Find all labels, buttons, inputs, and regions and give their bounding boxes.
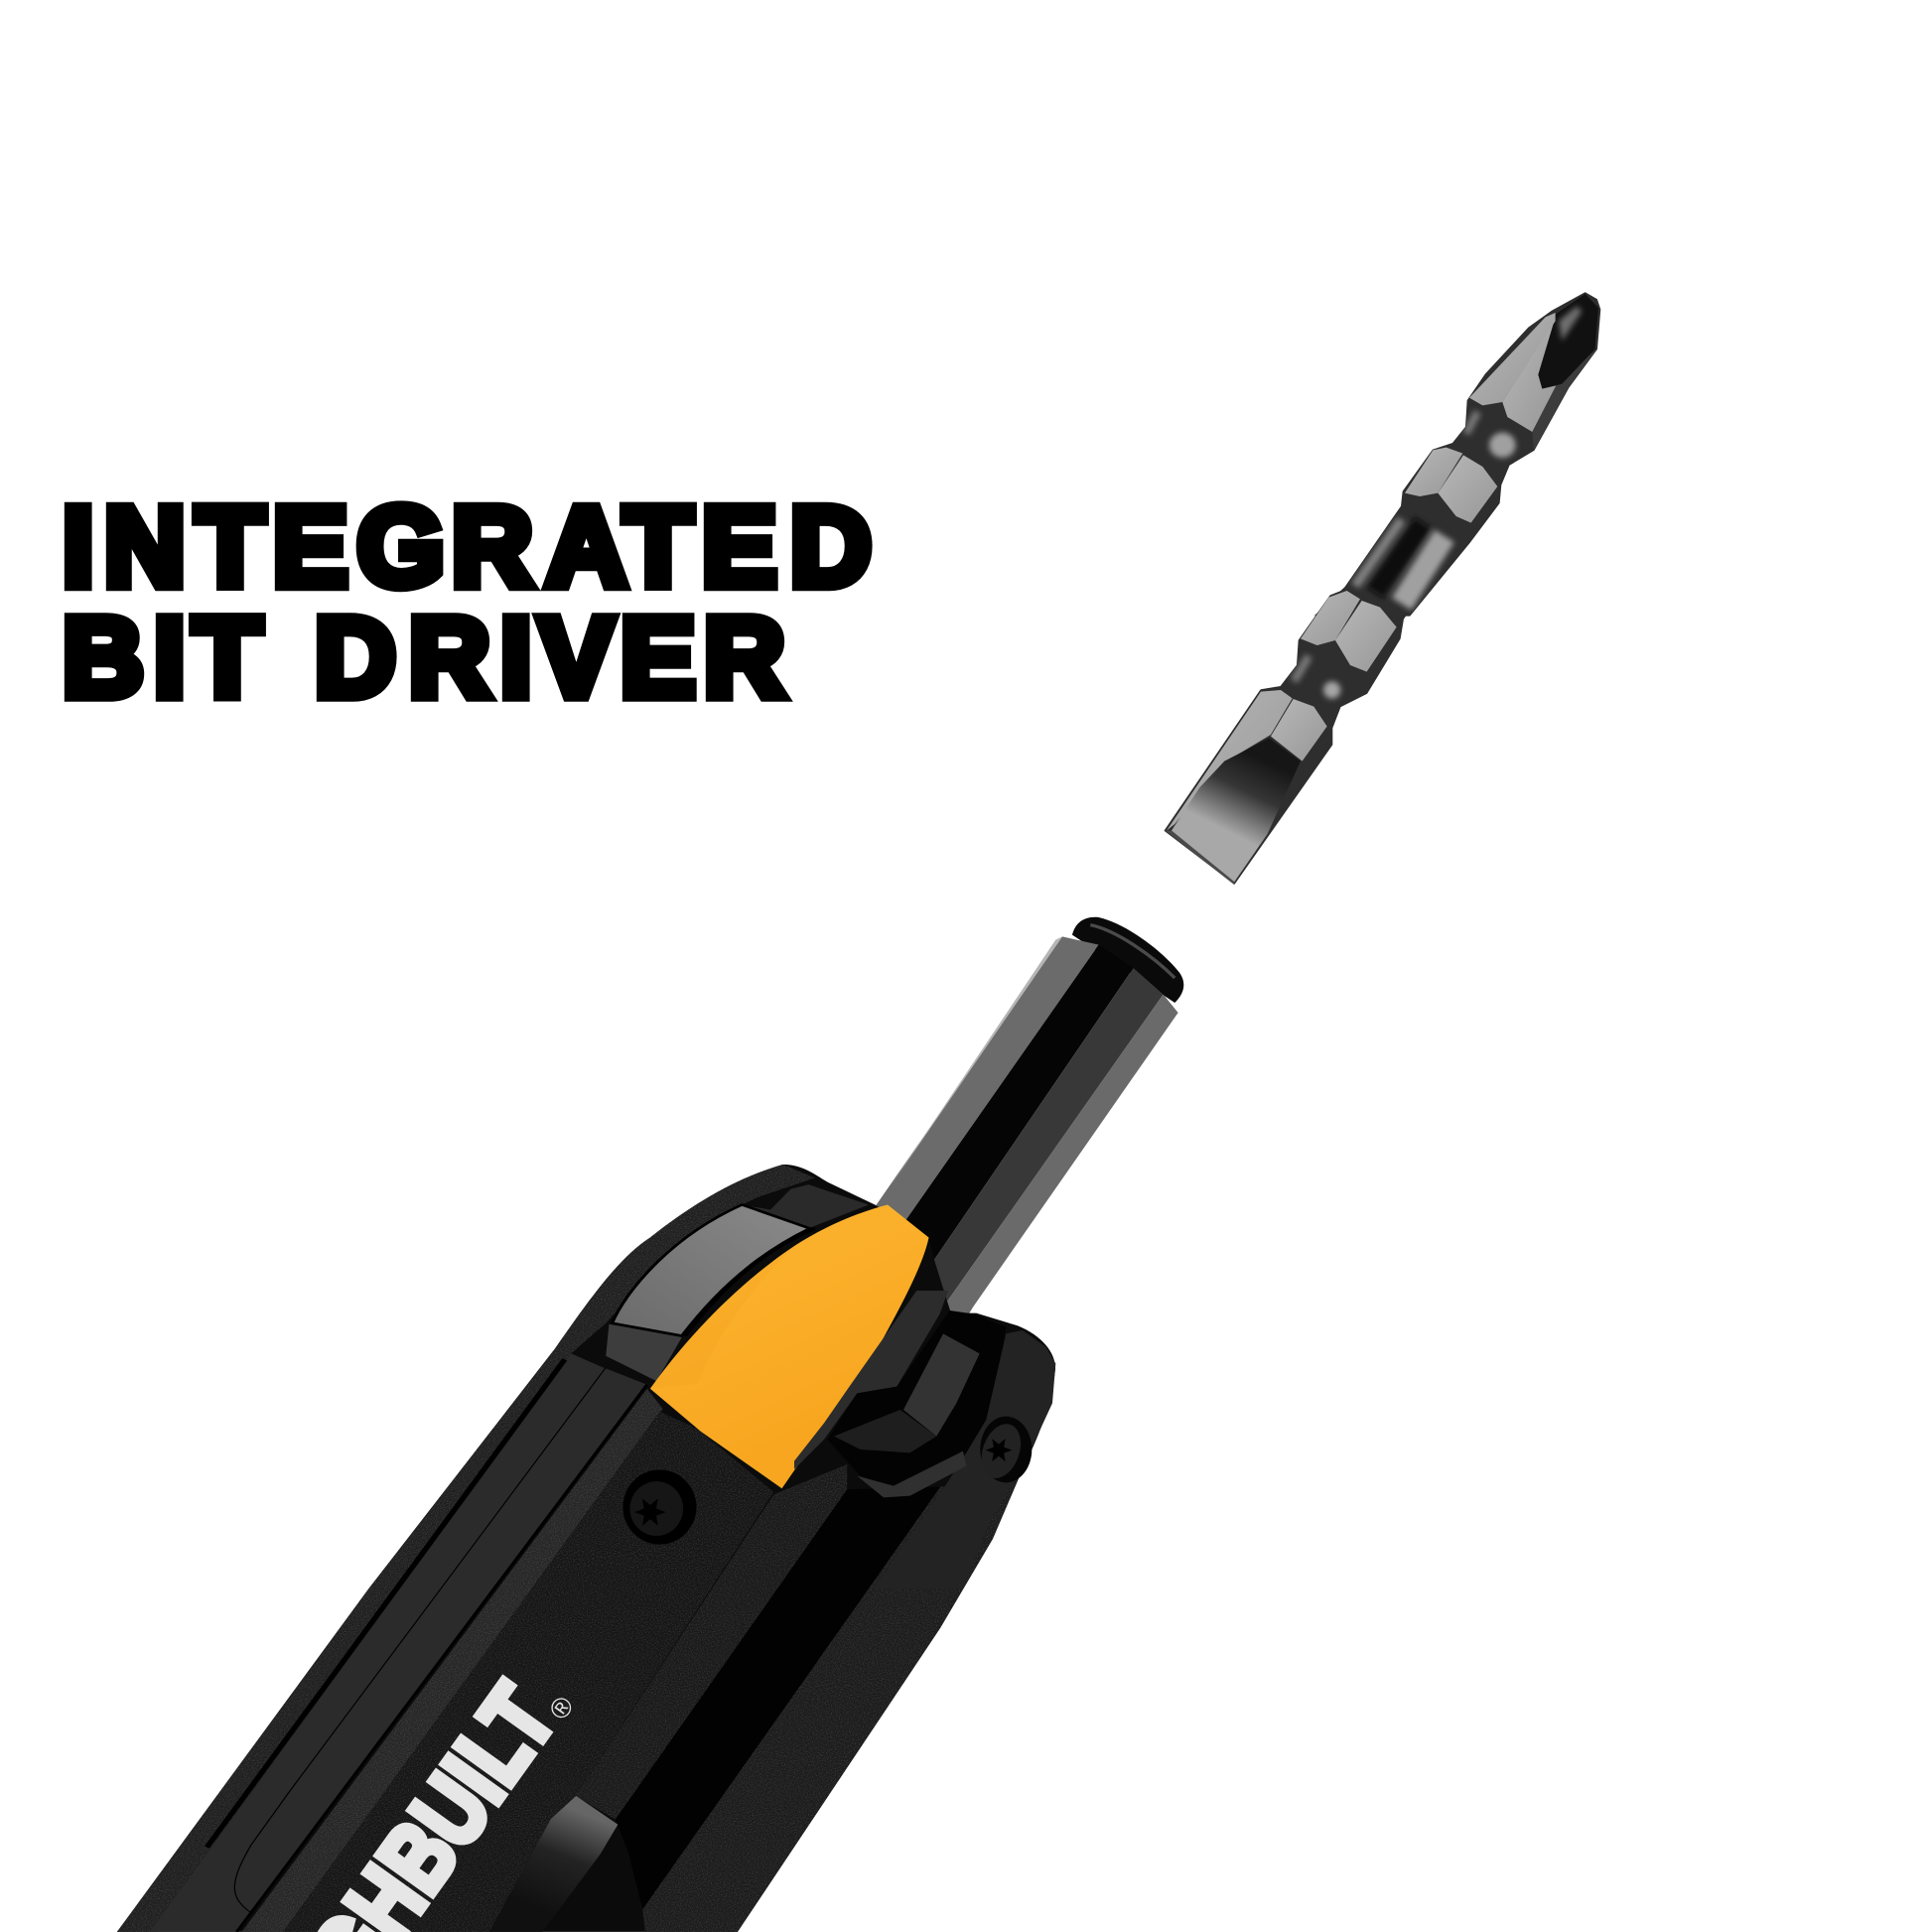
gray pad — [613, 1204, 810, 1335]
textured strip — [242, 1389, 663, 1932]
neck highlights — [1291, 653, 1340, 699]
hinge assembly — [794, 1291, 1055, 1588]
gap lines — [207, 1359, 647, 1932]
middle strip — [576, 1464, 847, 1820]
hex collar upper — [1405, 448, 1462, 496]
title — [63, 484, 872, 720]
bit lower silhouette — [1165, 576, 1433, 884]
shaft facets — [861, 936, 1099, 1238]
double-ended screwdriver bit — [1165, 293, 1600, 885]
title line 2: BIT DRIVER — [63, 595, 785, 720]
hex collar lower — [1301, 591, 1360, 645]
right rim — [874, 1330, 1055, 1588]
blade shoulder — [1167, 690, 1293, 831]
title line 1: INTEGRATED — [63, 484, 872, 610]
upper recess — [742, 1184, 869, 1228]
hinge screw — [974, 1417, 1032, 1484]
shank shading — [1355, 412, 1516, 604]
cam face — [903, 1333, 980, 1437]
left rim — [117, 1165, 815, 1932]
inner plates — [150, 1353, 647, 1932]
black hinge shell — [827, 1311, 1006, 1496]
cam tab — [857, 1451, 966, 1497]
bit lower half with slotted blade — [1166, 591, 1397, 885]
brand logo — [195, 1667, 580, 1932]
grip button — [489, 1796, 618, 1932]
bit upper half with phillips tip — [1315, 293, 1600, 616]
right rim — [642, 1469, 1023, 1932]
registered mark: ® — [543, 1691, 580, 1725]
main panel screw — [622, 1469, 696, 1545]
yellow ridge — [650, 1245, 796, 1389]
tool body — [117, 1165, 1055, 1932]
phillips facet right — [1502, 323, 1556, 432]
main panel — [283, 1412, 773, 1932]
blade face — [1172, 738, 1301, 882]
end cap — [1072, 917, 1183, 1003]
blade end edge — [1166, 831, 1234, 885]
phillips facet left — [1469, 313, 1556, 405]
hex drive shaft — [861, 917, 1183, 1315]
upper silhouette — [1315, 293, 1600, 616]
phillips groove — [1537, 294, 1598, 389]
dark recess — [616, 1487, 940, 1909]
neck strip — [794, 1291, 948, 1469]
cam lower face — [834, 1410, 936, 1452]
phillips lower dark facet — [1532, 349, 1596, 450]
yellow slider — [650, 1204, 929, 1488]
body silhouette — [117, 1165, 1055, 1932]
